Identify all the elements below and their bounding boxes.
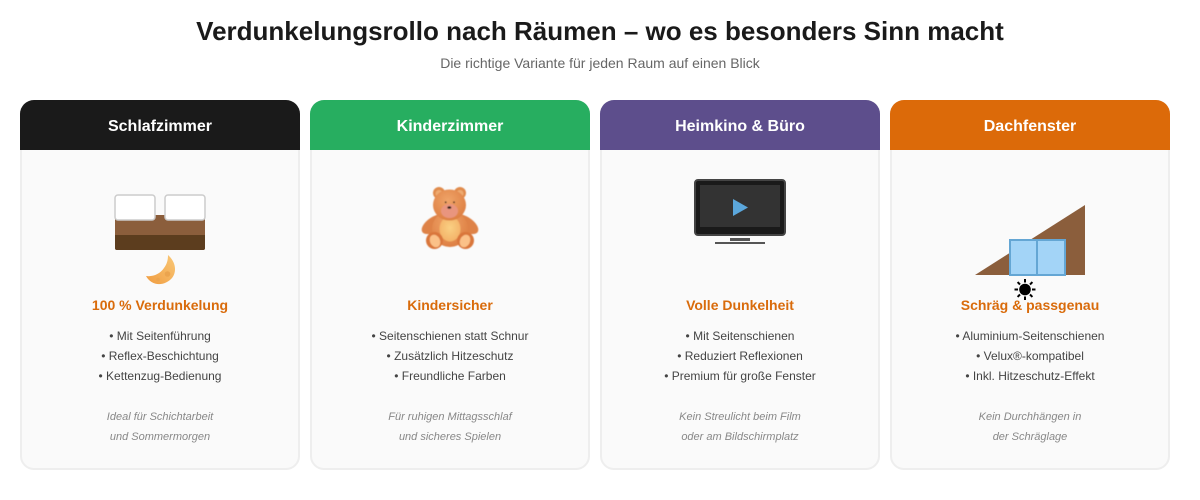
- feature list: [372, 329, 528, 383]
- header: Dachfenster: Dachfenster: [984, 118, 1076, 135]
- note: [679, 411, 801, 443]
- feature list: • Seitenschienen statt Schnur: [372, 329, 528, 343]
- icon: sun: [1014, 279, 1036, 300]
- panel: Schlafzimmer: [20, 100, 300, 469]
- icon: screen: [695, 180, 785, 244]
- feature list: • Freundliche Farben: [394, 369, 506, 383]
- feature list: • Premium für große Fenster: [664, 369, 816, 383]
- note: und sicheres Spielen: [399, 431, 501, 443]
- subheading: 100 % Verdunkelung: [92, 297, 228, 313]
- panel: Kinderzimmer: [310, 100, 590, 469]
- note: der Schräglage: [993, 431, 1067, 443]
- header: Kinderzimmer: [310, 100, 590, 150]
- panel: Heimkino & Büro: [600, 100, 880, 469]
- header: Schlafzimmer: Schlafzimmer: [108, 118, 212, 135]
- note: Kein Durchhängen in: [979, 411, 1081, 423]
- icon: bed: [115, 195, 205, 250]
- note: Kein Streulicht beim Film: [679, 411, 801, 423]
- subheading: Schräg & passgenau: [961, 297, 1099, 313]
- note: oder am Bildschirmplatz: [681, 431, 799, 443]
- panel: Dachfenster: [890, 100, 1170, 469]
- feature list: • Kettenzug-Bedienung: [99, 369, 221, 383]
- header: Heimkino & Büro: Heimkino & Büro: [675, 118, 805, 135]
- feature list: • Mit Seitenführung: [109, 329, 211, 343]
- header: Kinderzimmer: Kinderzimmer: [397, 118, 503, 135]
- feature list: • Aluminium-Seitenschienen: [956, 329, 1104, 343]
- note: Ideal für Schichtarbeit: [107, 411, 214, 423]
- feature list: • Inkl. Hitzeschutz-Effekt: [965, 369, 1095, 383]
- subheading: Volle Dunkelheit: [686, 297, 794, 313]
- header: Schlafzimmer: [20, 100, 300, 150]
- feature list: [99, 329, 221, 383]
- header: Dachfenster: [890, 100, 1170, 150]
- feature list: • Mit Seitenschienen: [686, 329, 794, 343]
- header: Heimkino & Büro: [600, 100, 880, 150]
- note: und Sommermorgen: [110, 431, 210, 443]
- note: Für ruhigen Mittagsschlaf: [388, 411, 513, 423]
- title: Verdunkelungsrollo nach Räumen – wo es besonders Sinn macht: [196, 16, 1004, 46]
- feature list: • Zusätzlich Hitzeschutz: [387, 349, 513, 363]
- icon: teddy bear: [418, 187, 482, 249]
- feature list: • Reflex-Beschichtung: [101, 349, 219, 363]
- feature list: • Reduziert Reflexionen: [677, 349, 803, 363]
- note: [979, 411, 1081, 443]
- feature list: [956, 329, 1104, 383]
- icon: roof window: [975, 205, 1085, 275]
- subheading: Kindersicher: [407, 297, 493, 313]
- icon: crescent moon: [146, 255, 175, 284]
- feature list: • Velux®-kompatibel: [976, 349, 1084, 363]
- note: [388, 411, 513, 443]
- note: [107, 411, 214, 443]
- feature list: [664, 329, 816, 383]
- subtitle: Die richtige Variante für jeden Raum auf einen Blick: [440, 55, 761, 71]
